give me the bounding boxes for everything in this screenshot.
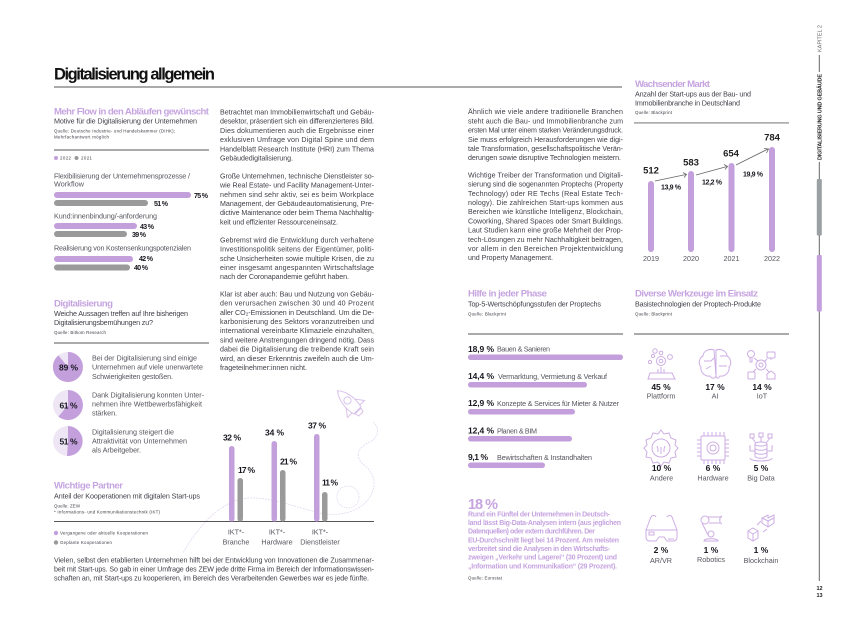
page numbers	[816, 586, 823, 599]
text block: column 3: Bereichen wie künstliche Intelligenz, Blockchain,	[468, 208, 623, 216]
text block: column 2: aller CO₂-Emissionen in Deutschland. Um die De-	[220, 309, 375, 317]
bar chart: 11 %	[322, 478, 338, 488]
legend: 2022	[60, 156, 72, 161]
text block: column 2: Gebäudedigitalisierung.	[220, 154, 293, 162]
row: Bewirtschaften	[468, 452, 592, 468]
title: Digitalisierung allgemein	[54, 66, 215, 84]
text block: column 3: nology). Die zahlreichen Start-ups kommen aus	[468, 199, 623, 207]
source: Mehrfachantwort möglich	[54, 134, 110, 140]
icon: Plattform	[648, 349, 675, 379]
page numbers: 13	[816, 593, 823, 599]
icon: Robotics	[701, 516, 722, 541]
callout: 18 %: EU-Durchschnitt liegt bei 14 Prozent. Am meisten	[468, 537, 619, 544]
bar chart: 32 %	[223, 432, 241, 442]
text block: column 2: sind weitere Anstrengungen dringend nötig. Dass	[220, 336, 374, 344]
text block: column 2: Große Unternehmen, technische Dienstleister so-	[220, 172, 375, 180]
text block: column 2: karbonisierung des Sektors voranzutreiben und	[220, 318, 374, 326]
heading: Digitalisierung	[54, 298, 113, 310]
subtitle: Immobilienbranche in Deutschland	[635, 98, 740, 108]
pie 51%: Digitalisierung steigert die	[92, 428, 174, 436]
row: Vermarktung: 14,4 %	[468, 371, 494, 381]
bar group: Kostensenkung	[54, 244, 191, 272]
callout: 18 %: zweigen „Verkehr und Lagerei“ (30 Prozent) und	[468, 555, 617, 562]
bar chart: start-ups: 2020	[683, 254, 699, 263]
text block: column 3: Technology) oder RE Techs (Real Estate Tech-	[468, 190, 624, 198]
bar group: Flexibilisierung: Workflow	[54, 180, 85, 188]
text block: column 2: sche Unsicherheiten sowie multiple Krisen, die zu	[220, 255, 374, 263]
panel: Digitalisierung	[53, 298, 209, 456]
text block: column 2: desektor, präsentiert sich ein differenzierteres Bild.	[220, 118, 374, 126]
text block: partner: Vielen, selbst den etablierten Unternehmen hilft bei der Entwicklung von Innovationen die Zusammenar-	[54, 556, 375, 564]
label: Robotics: Robotics	[697, 555, 725, 564]
arrow 2021-2022	[736, 148, 768, 165]
text block: column 2: Handelblatt Research Institute (HRI) zum Thema	[220, 145, 374, 153]
text block: column 2: keit und effizienter Ressourceneinsatz.	[220, 218, 338, 226]
text block: column 3: Ähnlich wie viele andere traditionelle Branchen	[468, 108, 623, 116]
text block: column 2: Dies dokumentieren auch die Ergebnisse einer	[220, 127, 375, 135]
source: * Informations- und Kommunikationstechnik (IKT)	[54, 510, 161, 514]
text block: column 3: vor allem in den Bereichen Projektentwicklung	[468, 245, 623, 253]
pie 61%: 61 %	[60, 400, 78, 410]
bar chart: start-ups: 12,2 %	[702, 180, 723, 186]
label: AR/VR	[650, 545, 672, 565]
bar group: Kundenbindung: Kund:innenbindung/-anforderung	[54, 212, 157, 220]
bar chart: 17 %	[238, 465, 255, 475]
row: Planen: Planen & BIM	[497, 426, 537, 436]
source	[54, 128, 175, 140]
bar group: Kostensenkung: 42 %	[139, 256, 154, 263]
pie 61%: nehmen ihre Wettbewerbsfähigkeit	[92, 400, 202, 408]
label: Andere: 10 %	[652, 463, 672, 473]
subtitle	[635, 90, 751, 108]
bar chart: start-ups: 2021	[724, 254, 740, 263]
label: Blockchain: Blockchain	[744, 556, 778, 565]
row: Bauen	[468, 344, 623, 360]
label: AI	[705, 382, 725, 400]
row: Bauen: 18,9 %	[468, 344, 494, 354]
label: Blockchain: 1 %	[754, 545, 769, 555]
callout: 18 %: verbreitet sind die Analysen in den Wirtschafts-	[468, 546, 611, 553]
label: Hardware: Hardware	[697, 474, 729, 482]
bar chart: start-ups: 2022	[764, 254, 780, 263]
bar chart	[223, 420, 340, 546]
background trail decoration	[183, 422, 377, 553]
pie 89%: Unternehmen auf viele unerwartete	[92, 362, 203, 372]
text block: column 3: und Property Management.	[468, 254, 553, 262]
text block: column 2: wird, an dieser Erkenntnis zweifeln auch die Um-	[219, 355, 375, 363]
label: Robotics: 1 %	[704, 545, 719, 555]
subtitle: Motive für die Digitalisierung der Unternehmen	[54, 116, 197, 126]
text block: column 3: derungen sowie disruptive Technologien meistern.	[468, 154, 621, 162]
page numbers: 12	[816, 586, 823, 592]
label: IoT	[752, 382, 772, 400]
label: AI: AI	[712, 392, 718, 400]
subtitle	[54, 309, 188, 327]
bar chart: start-ups: 784	[764, 132, 781, 144]
bar group: Kostensenkung: Realisierung von Kostensenkungspotenzialen	[54, 244, 191, 252]
legend: 2021	[81, 156, 93, 161]
text block: column 3: tale Transformation, gesellschaftspolitische Verän-	[468, 145, 624, 153]
subtitle: Anzahl der Start-ups aus der Bau- und	[635, 90, 751, 98]
text block: column 2: international vereinbarte Klimaziele einzuhalten,	[220, 327, 374, 335]
arrow 2020-2021	[696, 164, 728, 175]
subtitle: Anteil der Kooperationen mit digitalen Start-ups	[54, 492, 200, 500]
label: Hardware	[697, 463, 729, 482]
row: Konzepte: 12,9 %	[468, 398, 494, 408]
pie 89%: Bei der Digitalisierung sind einige	[92, 354, 197, 362]
icon: Big Data	[749, 433, 773, 461]
heading: Hilfe in jeder Phase	[468, 288, 547, 300]
bar chart: start-ups: 13,9 %	[661, 184, 682, 192]
bar chart: start-ups	[643, 132, 781, 263]
bar chart: Branche	[223, 538, 249, 546]
text block: column 2: einer insgesamt angespannten Wirtschaftslage	[220, 264, 374, 272]
icon: Blockchain	[748, 515, 774, 541]
text block: column 2	[219, 108, 375, 372]
bar chart: 34 %	[265, 428, 284, 438]
icon: Andere	[644, 430, 678, 466]
subtitle: Top-5-Wertschöpfungsstufen der Proptechs	[468, 300, 601, 308]
bar group: Flexibilisierung: 75 %	[194, 193, 209, 200]
label: Big Data	[747, 463, 775, 482]
bar group: Kundenbindung: 43 %	[140, 224, 155, 231]
subtitle: Basistechnologien der Proptech-Produkte	[635, 300, 761, 308]
label: Big Data: 5 %	[754, 463, 769, 473]
label: Robotics	[697, 545, 725, 564]
row: Bewirtschaften: Bewirtschaften & Instandhalten	[497, 453, 592, 462]
pie 51%: 51 %	[60, 436, 78, 446]
callout: 18 %	[468, 497, 621, 580]
sidebar: navigation	[815, 25, 824, 599]
label: Andere	[650, 463, 673, 482]
text block: column 2: Investitionspolitik seitens der Eigentümer, politi-	[220, 246, 375, 254]
bar chart: IKT*-	[269, 528, 286, 536]
bar chart: Hardware	[261, 538, 293, 546]
label: AR/VR: 2 %	[654, 545, 669, 555]
icon: rocket	[329, 382, 369, 422]
label: Plattform: Plattform	[647, 392, 675, 400]
label: Hardware: 6 %	[706, 463, 721, 473]
panel: Hilfe in jeder Phase	[468, 288, 623, 468]
bar group: Kundenbindung: 39 %	[132, 232, 147, 239]
label: Andere: Andere	[650, 474, 673, 482]
text block: column 2: Gebremst wird die Entwicklung durch verhaltene	[220, 236, 374, 244]
bar chart: start-ups: 19,9 %	[743, 172, 764, 178]
callout: 18 %: 18 %	[468, 497, 498, 513]
text block: column 2: Klar ist aber auch: Bau und Nutzung von Gebäu-	[220, 290, 375, 298]
callout: 18 %: land lässt Big-Data-Analysen intern (aus jeglichen	[468, 520, 621, 527]
subtitle: Digitalisierungsbemühungen zu?	[54, 318, 153, 327]
source: Quelle: Blackprint	[635, 312, 673, 316]
row: Bewirtschaften: 9,1 %	[468, 452, 488, 462]
panel: Wichtige Partner	[54, 420, 375, 582]
text block: column 2: nach der Coronapandemie geführt haben.	[220, 273, 349, 281]
text block: column 3: Wichtige Treiber der Transformation und Digitali-	[468, 171, 624, 179]
text block: column 3: Laut Studien kann eine große Mehrheit der Prop-	[468, 227, 624, 235]
icon: AI	[699, 349, 731, 378]
source: Quelle: ZEW	[54, 504, 81, 508]
bar chart: IKT*-	[228, 528, 245, 536]
bar chart: 37 %	[308, 420, 326, 430]
row: Vermarktung	[468, 371, 607, 388]
icon: IoT	[748, 350, 775, 379]
pie 61%: Dank Digitalisierung konnten Unter-	[92, 390, 205, 400]
text block: column 3: Coworking, Shared Spaces oder Smart Buildings.	[468, 217, 623, 225]
heading: Mehr Flow in den Abläufen gewünscht	[54, 106, 210, 118]
text block: partner: beit mit Start-ups. So gab in einer Umfrage des ZEW jede dritte Firma im Bereich der Informationswissen-	[54, 566, 375, 574]
source: Quelle: Blackprint	[635, 110, 673, 115]
heading: Diverse Werkzeuge im Einsatz	[635, 288, 758, 300]
arrow 2019-2020	[655, 172, 686, 181]
pie 89%: Schwierigkeiten gestoßen.	[92, 372, 173, 381]
bar group: Flexibilisierung	[54, 172, 209, 208]
bar group: Flexibilisierung: Flexibilisierung der Unternehmensprozesse /	[54, 172, 190, 180]
text block: column 2: wie Real Estate- und Facility Management-Unter-	[219, 182, 375, 190]
text block: column 2: Management, der Gebäudeautomatisierung, Pre-	[220, 200, 375, 208]
pie 89%: 89 %	[59, 362, 78, 372]
heading: Wichtige Partner	[54, 480, 123, 492]
row: Planen	[468, 426, 572, 442]
pie 51%	[53, 426, 187, 456]
heading: Wachsender Markt	[635, 79, 711, 90]
source: Quelle: Blackprint	[468, 312, 507, 316]
label: IoT: IoT	[757, 392, 768, 400]
bar chart: 21 %	[280, 456, 297, 466]
text block: column 3: steht auch die Bau- und Immobilienbranche zum	[468, 117, 623, 125]
source: Quelle: Deutsche Industrie- und Handelskammer (DIHK);	[54, 128, 175, 134]
legend: Vergangene oder aktuelle Kooperationen	[60, 531, 149, 536]
panel: Wachsender Markt	[634, 79, 789, 263]
legend: Geplante Kooperationen	[60, 540, 113, 545]
label: Digitalisierung und Gebäude: DIGITALISIERUNG UND GEBÄUDE	[816, 74, 824, 160]
callout: 18 %: Quelle: Eurostat	[468, 576, 503, 580]
label: Kapitel: KAPITEL 2	[818, 25, 824, 52]
row: Planen: 12,4 %	[468, 426, 494, 436]
bar chart: Dienstleister	[300, 538, 340, 546]
legend	[54, 156, 93, 161]
label: AR/VR: AR/VR	[650, 556, 672, 565]
row: Konzepte	[468, 398, 620, 414]
bar chart: start-ups: 2019	[643, 254, 659, 263]
label: IoT: 14 %	[752, 382, 772, 392]
callout: 18 %: „Information und Kommunikation“ (29 Prozent).	[468, 563, 617, 570]
callout: 18 %: Rund ein Fünftel der Unternehmen in Deutsch-	[468, 511, 611, 518]
bar chart: start-ups: 654	[723, 148, 740, 160]
text block: column 3: sierung sind die sogenannten Proptechs (Property	[468, 181, 623, 189]
legend	[54, 531, 149, 545]
source	[54, 504, 161, 514]
label: Blockchain	[744, 545, 778, 565]
label: Big Data: Big Data	[747, 474, 775, 482]
text block: column 3: tech-Lösungen zu mehr Nachhaltigkeit beitragen,	[468, 236, 623, 244]
panel: Mehr Flow	[54, 106, 210, 272]
bar chart: IKT*-	[312, 528, 329, 536]
text block: column 3: Sie muss erfolgreich Herausforderungen wie digi-	[468, 136, 624, 144]
row: Bauen: Bauen & Sanieren	[497, 344, 550, 354]
subtitle: Weiche Aussagen treffen auf Ihre bisherigen	[54, 309, 188, 318]
text block: column 2: dictive Maintenance oder beim Thema Nachhaltig-	[220, 209, 375, 217]
icon: AR/VR	[646, 516, 677, 541]
pie 89%	[53, 352, 203, 382]
bar group: Flexibilisierung: 51 %	[154, 201, 169, 208]
callout: 18 %: Datenquellen) oder extern durchführen. Der	[468, 529, 595, 536]
row: Vermarktung: Vermarktung, Vermietung & Verkauf	[498, 372, 607, 381]
text block: column 2: dabei die Digitalisierung die treibende Kraft sein	[220, 346, 374, 354]
label: Plattform: 45 %	[651, 382, 671, 392]
text block: partner	[54, 556, 375, 582]
pie 51%: Attraktivität von Unternehmen	[92, 436, 187, 446]
pie 61%: stärken.	[92, 408, 117, 418]
text block: column 2: frageteilnehmer:innen nicht.	[220, 364, 307, 372]
icon: Hardware	[697, 432, 729, 464]
pie 61%	[53, 390, 205, 420]
row: Konzepte: Konzepte & Services für Mieter & Nutzer	[497, 399, 620, 408]
bar chart: start-ups: 512	[643, 166, 659, 176]
text block: partner: schaften an, mit Start-ups zu kooperieren, im Bereich des Verarbeitenden Gewerbes war es jede fünfte.	[54, 574, 369, 582]
bar chart: start-ups: 583	[683, 158, 699, 168]
source: Quelle: Bitkom Research	[54, 330, 107, 335]
label: Plattform	[647, 382, 675, 400]
text block: column 3: ersten Mal unter einem starken Veränderungsdruck.	[468, 127, 623, 135]
text block: column 2: exklusiven Umfrage von Digital Spine und dem	[220, 136, 374, 144]
text block: column 2: Betrachtet man Immobilienwirtschaft und Gebäu-	[220, 108, 375, 116]
bar group: Kundenbindung	[54, 212, 157, 239]
panel: Diverse Werkzeuge	[634, 288, 789, 565]
label: AI: 17 %	[705, 382, 725, 392]
bar group: Kostensenkung: 40 %	[134, 265, 149, 272]
text block: column 2: den verursachen zwischen 30 und 40 Prozent	[220, 300, 374, 308]
text block: column 3	[468, 108, 624, 262]
pie 51%: als Arbeitgeber.	[92, 446, 141, 454]
text block: column 2: nehmen sind sehr aktiv, sei es beim Workplace	[220, 191, 374, 199]
